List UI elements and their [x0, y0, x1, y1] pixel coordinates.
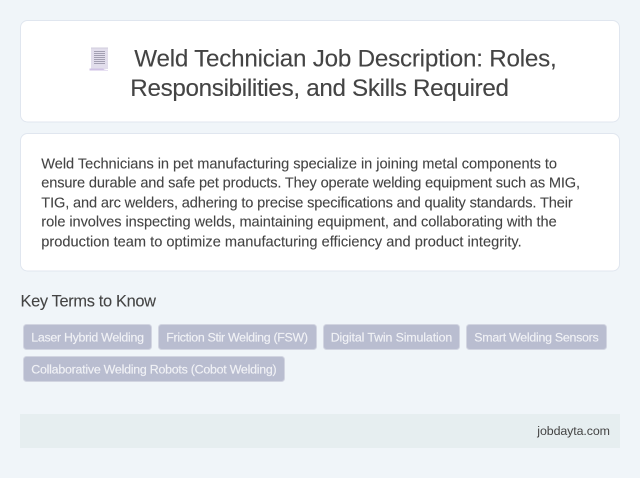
tags: key terms: [24, 324, 606, 382]
tag: friction stir welding: [158, 324, 316, 350]
tag: smart welding sensors: Smart Welding Sensors: [474, 331, 599, 345]
tag: collaborative welding robots: Collaborative Welding Robots (Cobot Welding): [31, 363, 277, 377]
description text: Weld Technicians in pet manufacturing specialize in joining metal components to: [41, 156, 557, 172]
tag: digital twin simulation: [324, 324, 460, 350]
panel: description: [20, 134, 620, 271]
heading: key terms: Key Terms to Know: [20, 293, 156, 311]
title: [130, 46, 557, 102]
footer source text: jobdayta.com: [536, 424, 610, 438]
description text: [41, 156, 580, 250]
description text: TIG, and arc welders, adhering to precise specifications and quality standards. Their: [41, 195, 573, 211]
description text: role involves inspecting welds, maintaining equipment, and collaborating with the: [41, 215, 557, 231]
tag: digital twin simulation: Digital Twin Simulation: [331, 331, 452, 345]
icon: document scroll: [90, 48, 108, 70]
footer: [20, 414, 620, 448]
panel: title card: [20, 20, 620, 122]
description text: ensure durable and safe pet products. They operate welding equipment such as MIG,: [41, 176, 580, 192]
tag: laser hybrid welding: [24, 324, 152, 350]
tag: laser hybrid welding: Laser Hybrid Welding: [31, 331, 144, 345]
title: Responsibilities, and Skills Required: [130, 75, 509, 102]
tag: friction stir welding: Friction Stir Welding (FSW): [166, 331, 308, 345]
description text: production team to optimize manufacturing efficiency and product integrity.: [41, 234, 522, 250]
tag: collaborative welding robots: [24, 356, 284, 382]
title: Weld Technician Job Description: Roles,: [134, 46, 557, 73]
tag: smart welding sensors: [466, 324, 606, 350]
